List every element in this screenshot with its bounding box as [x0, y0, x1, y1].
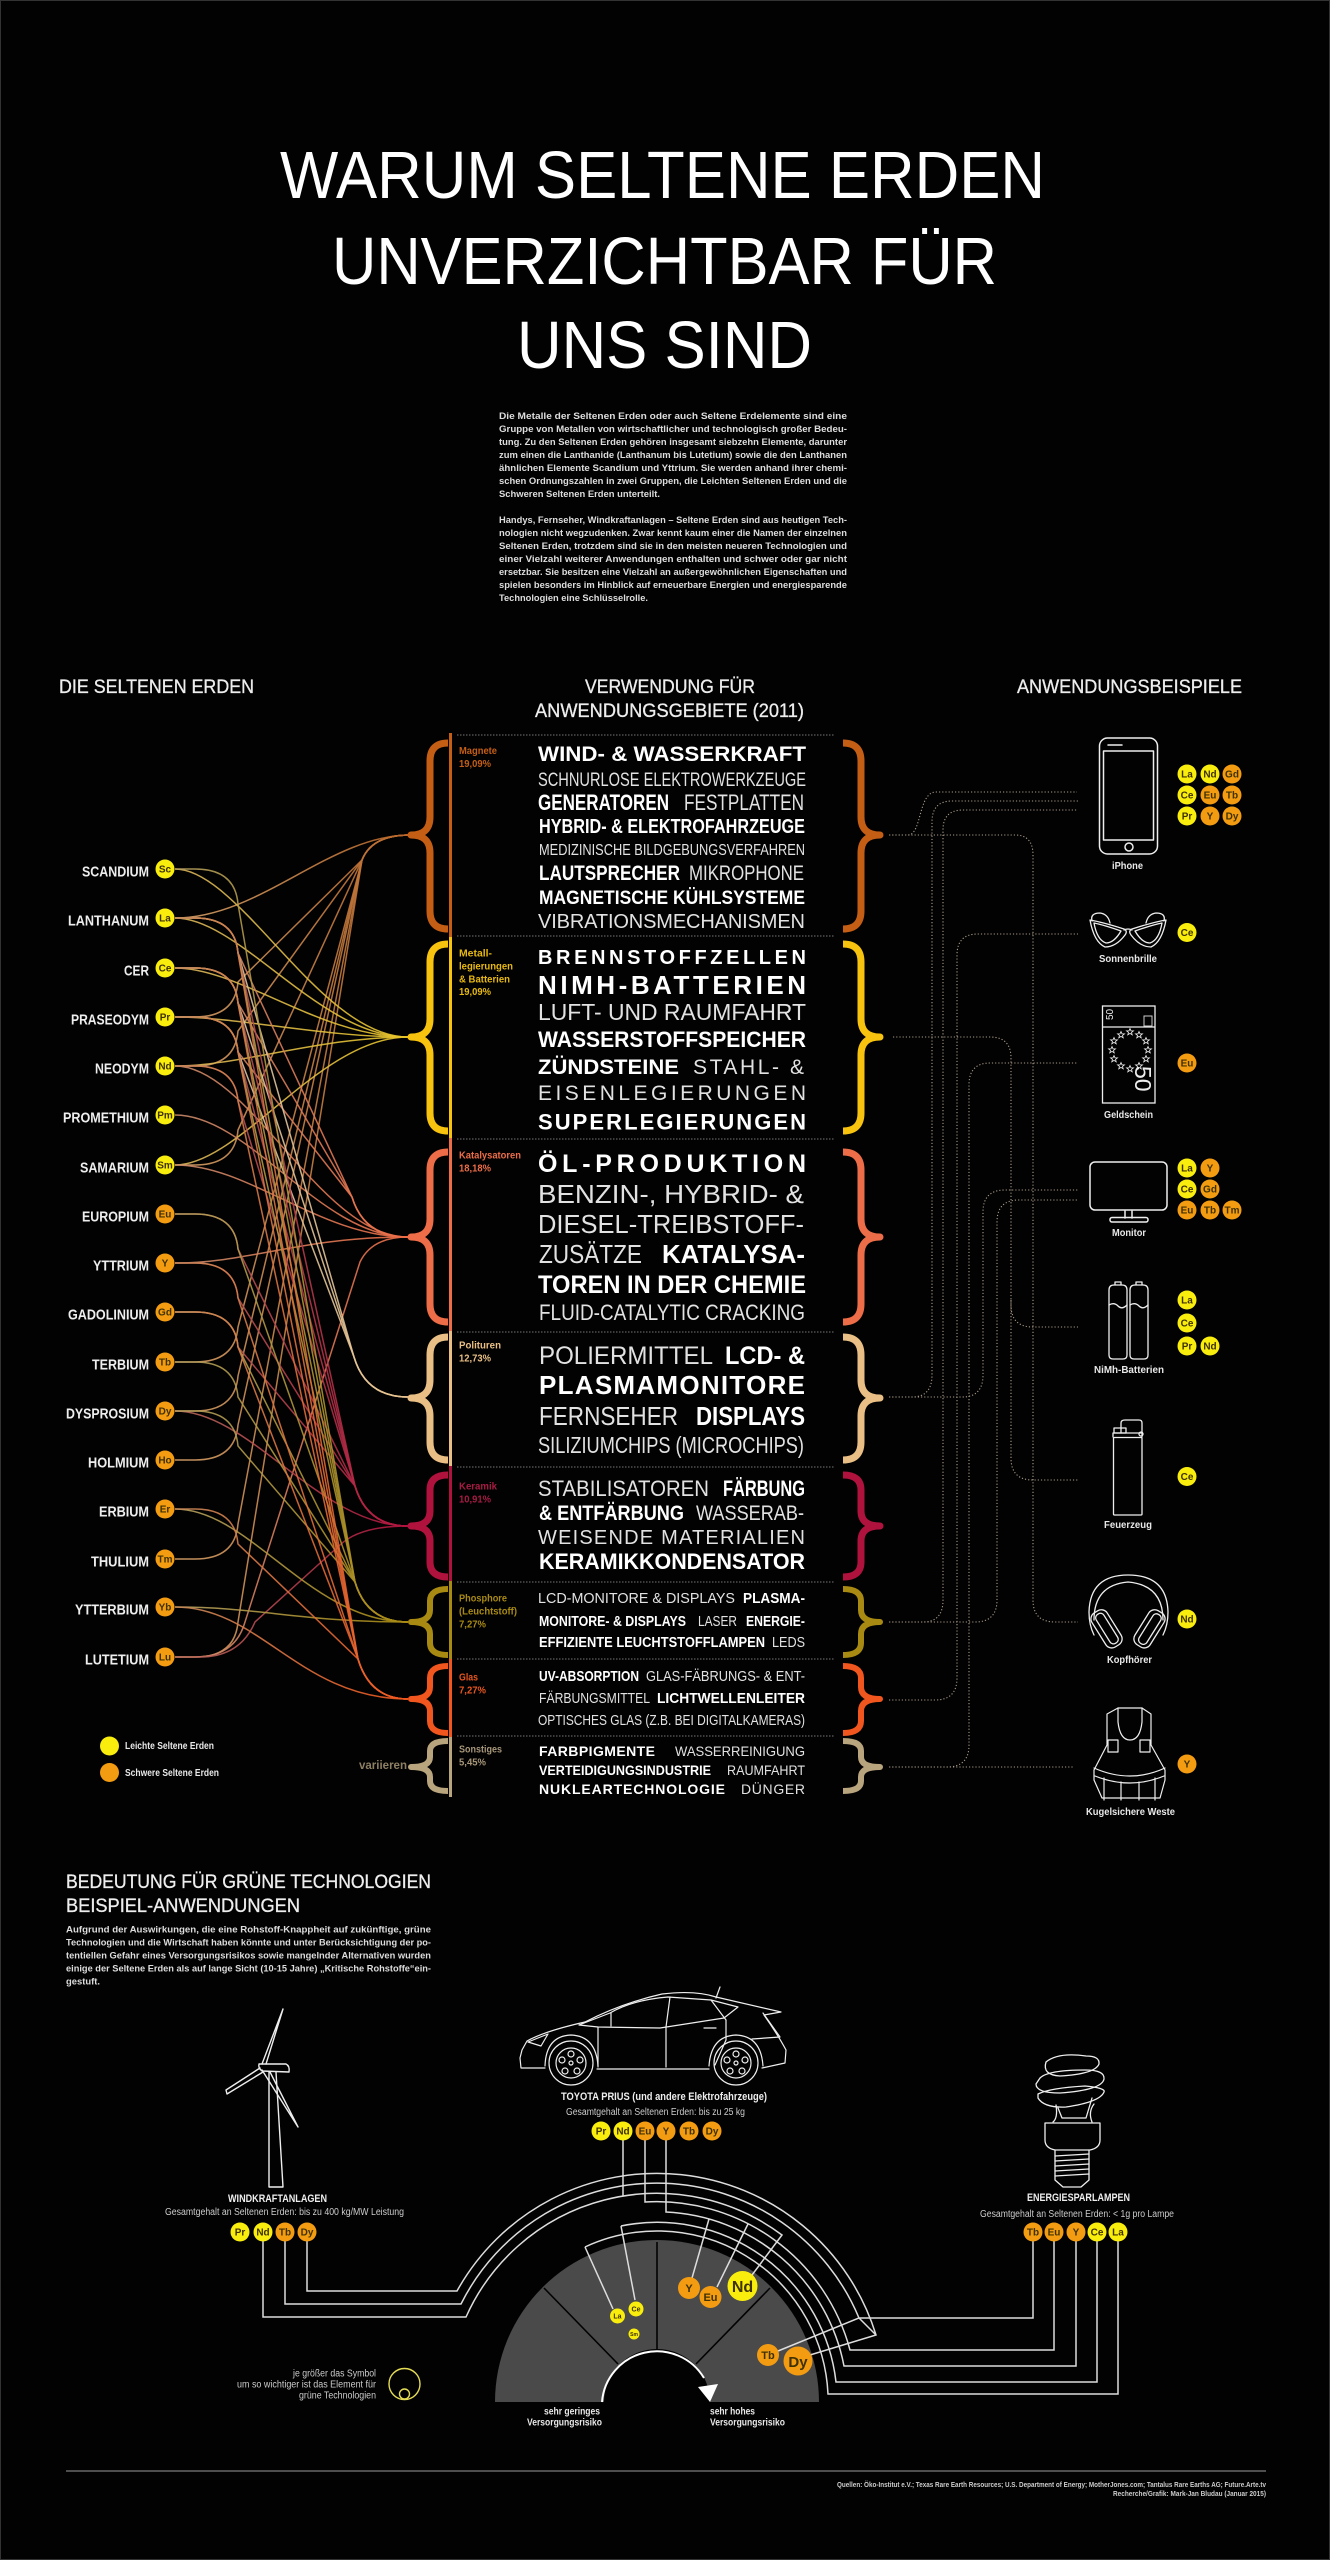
intro text: Die Metalle der Seltenen Erden oder auch Seltene Erdelemente sind eine: [499, 411, 847, 422]
uses: Phosphore: ENERGIE-: [746, 1614, 805, 1630]
element: ytterbium: YTTERBIUM: [75, 1602, 149, 1618]
label: sehr geringes Versorgungsrisiko: sehr geringes: [544, 2406, 600, 2418]
uses: Polituren: [538, 1342, 805, 1458]
element: terbium: [92, 1352, 174, 1374]
uses: Metalllegierungen: BRENNSTOFFZELLEN: [538, 947, 806, 969]
element: lutetium: Lu: [159, 1652, 171, 1664]
element: praseodym: Pr: [160, 1012, 170, 1024]
intro text: schen Ordnungszahlen in zwei Gruppen, die Leichten Seltenen Erden und die: [499, 476, 847, 487]
uses: Metalllegierungen: LUFT- UND RAUMFAHRT: [538, 999, 806, 1025]
text block: grüne Technologien: [66, 1924, 431, 1988]
element: lutetium: [85, 1648, 174, 1668]
legend: symbol size: je größer das Symbol: [292, 2368, 376, 2380]
category label: Polituren: [459, 1340, 501, 1364]
legend: symbol size: [237, 2368, 420, 2402]
element badges: Batterien: La: [1181, 1296, 1193, 1306]
label: Toyota Prius: TOYOTA PRIUS (und andere Elektrofahrzeuge): [561, 2091, 767, 2103]
category label: Keramik: [459, 1482, 497, 1506]
category label: Metalllegierungen: & Batterien: [459, 974, 510, 986]
example: Kopfhörer: [1088, 1575, 1196, 1666]
legend: element groups: [100, 1736, 219, 1782]
element badge: Ce: Ce: [1181, 928, 1194, 939]
uses: Katalysatoren: BENZIN-, HYBRID- &: [538, 1179, 804, 1209]
heading: grüne Technologien: [66, 1872, 431, 1917]
category label: Katalysatoren: [459, 1150, 521, 1174]
uses: Metalllegierungen: SUPERLEGIERUNGEN: [538, 1110, 806, 1134]
uses: Katalysatoren: TOREN IN DER CHEMIE: [538, 1271, 806, 1299]
element list: [63, 860, 174, 1668]
icon: banknote: [1102, 1006, 1156, 1103]
chart: supply risk semicircle: [495, 2240, 819, 2402]
element: gadolinium: Gd: [158, 1308, 172, 1318]
text block: grüne Technologien: tentiellen Gefahr eines Versorgungsrisikos sowie mangelnder Alternativen wurden: [66, 1950, 431, 1962]
element badges: risk chart: Y: [685, 2283, 693, 2295]
icon: car: [520, 1987, 786, 2085]
element badges: Monitor: La: [1181, 1164, 1193, 1174]
title: WARUM SELTENE ERDEN: [280, 138, 1045, 213]
element badges: Monitor: [1178, 1158, 1242, 1220]
uses: Glas: UV-ABSORPTION: [539, 1668, 639, 1685]
uses: Magnete: MAGNETISCHE KÜHLSYSTEME: [539, 888, 805, 909]
category label: Magnete: Magnete: [459, 746, 497, 757]
uses: Polituren: POLIERMITTEL: [539, 1342, 713, 1370]
element: gadolinium: GADOLINIUM: [68, 1306, 149, 1324]
element badges: Windkraftanlagen: Nd: [256, 2228, 270, 2238]
intro text: ähnlichen Elemente Scandium und Yttrium. Sie werden anhand ihrer chemi-: [499, 463, 847, 474]
dotted connector lines to examples: [889, 792, 1078, 1767]
uses: Keramik: & ENTFÄRBUNG: [539, 1502, 684, 1525]
category label: Phosphore: Phosphore: [459, 1594, 507, 1604]
title: UNVERZICHTBAR FÜR: [332, 224, 997, 299]
column heading: verwendung: ANWENDUNGSGEBIETE (2011): [535, 701, 804, 722]
element: neodym: NEODYM: [95, 1060, 149, 1078]
element: terbium: Tb: [159, 1358, 171, 1368]
uses: Magnete: VIBRATIONSMECHANISMEN: [538, 911, 805, 933]
element: lanthanum: La: [159, 914, 171, 924]
heading: grüne Technologien: BEISPIEL-ANWENDUNGEN: [66, 1896, 300, 1917]
element badge: Y: Y: [1184, 1760, 1191, 1770]
intro text: einer Vielzahl weiterer Anwendungen enthalten und schwer oder gar nicht: [499, 554, 848, 565]
element badges: Batterien: Pr: [1182, 1342, 1192, 1352]
uses: Metalllegierungen: EISENLEGIERUNGEN: [538, 1082, 806, 1105]
uses: Keramik: WASSERAB-: [696, 1502, 804, 1525]
element badges: Toyota Prius: Nd: [616, 2126, 630, 2138]
uses: Magnete: GENERATOREN: [538, 790, 669, 815]
intro text: [499, 411, 848, 604]
icon: sunglasses: [1090, 913, 1166, 947]
connector lines: elements to Magnete: [175, 835, 410, 1657]
element badges: Windkraftanlagen: Dy: [301, 2228, 314, 2238]
example: Feuerzeug: Feuerzeug: [1104, 1520, 1152, 1531]
example: Sonnenbrille: [1090, 913, 1196, 965]
category label: Magnete: 19,09%: [459, 759, 491, 770]
category label: Magnete: [459, 746, 497, 770]
element: dysprosium: DYSPROSIUM: [66, 1406, 149, 1422]
element: thulium: THULIUM: [91, 1554, 149, 1570]
icon: energy saving bulb: [1036, 2055, 1104, 2187]
title: [280, 138, 1045, 383]
uses: Keramik: STABILISATOREN: [538, 1476, 709, 1501]
element: neodym: Nd: [158, 1062, 172, 1072]
element badges: risk chart: Nd: [732, 2279, 753, 2296]
uses: Magnete: LAUTSPRECHER: [539, 862, 680, 885]
element badges: Toyota Prius: [592, 2122, 722, 2140]
example: Kopfhörer: Kopfhörer: [1107, 1655, 1152, 1666]
connector lines: elements to Katalysatoren: [175, 918, 408, 1657]
element badges: iPhone: La: [1181, 770, 1193, 780]
category label: Glas: 7,27%: [459, 1686, 486, 1696]
text block: grüne Technologien: Technologien und die Wirtschaft haben könnte und unter Berücksichtigung der po-: [66, 1938, 431, 1948]
element badges: Batterien: Nd: [1203, 1342, 1217, 1352]
label: Windkraftanlagen: [165, 2193, 404, 2218]
uses: Metalllegierungen: [538, 947, 806, 1134]
uses: Katalysatoren: ÖL-PRODUKTION: [538, 1149, 806, 1178]
uses: Polituren: LCD- &: [725, 1342, 805, 1370]
icon: banknote: 50: [1130, 1066, 1156, 1092]
element badges: Monitor: Tb: [1204, 1206, 1216, 1216]
uses: Phosphore: LEDS: [772, 1635, 805, 1651]
element badges: Energiesparlampen: Ce: [1091, 2228, 1104, 2238]
element badges: Batterien: [1178, 1290, 1220, 1356]
icon: lighter: [1113, 1420, 1143, 1515]
panel: Magnete: [411, 733, 880, 937]
label: Energiesparlampen: Gesamtgehalt an Seltenen Erden: < 1g pro Lampe: [980, 2209, 1174, 2220]
element: holmium: HOLMIUM: [88, 1454, 149, 1472]
legend: symbol size: um so wichtiger ist das Element für: [237, 2380, 377, 2390]
element badges: iPhone: Tb: [1226, 790, 1238, 802]
uses: Katalysatoren: ZUSÄTZE: [539, 1239, 642, 1269]
category label: Polituren: 12,73%: [459, 1354, 491, 1364]
element: yttrium: YTTRIUM: [93, 1258, 149, 1274]
uses: Glas: OPTISCHES GLAS (Z.B. BEI DIGITALKAMERAS): [538, 1712, 805, 1729]
panel: Phosphore: [411, 1581, 880, 1659]
element badge: Ce: Ce: [1181, 1472, 1194, 1483]
category label: Metalllegierungen: legierungen: [459, 962, 513, 972]
element: ytterbium: Yb: [159, 1602, 171, 1614]
uses: Keramik: WEISENDE MATERIALIEN: [538, 1527, 805, 1549]
icon: monitor: [1090, 1162, 1167, 1222]
element badges: Windkraftanlagen: Pr: [235, 2228, 245, 2238]
element badges: iPhone: Ce: [1181, 790, 1194, 802]
legend: element groups: Schwere Seltene Erden: [125, 1768, 219, 1779]
label: Energiesparlampen: ENERGIESPARLAMPEN: [1027, 2192, 1130, 2204]
element badges: Energiesparlampen: Tb: [1027, 2228, 1039, 2238]
uses: Phosphore: EFFIZIENTE LEUCHTSTOFFLAMPEN: [539, 1635, 765, 1651]
example: Geldschein: [1102, 1006, 1196, 1121]
element badges: risk chart: Sm: [630, 2332, 638, 2338]
category label: Keramik: 10,91%: [459, 1494, 491, 1506]
category label: Glas: Glas: [459, 1672, 478, 1684]
icon: phone: [1100, 738, 1158, 854]
element: scandium: Sc: [159, 864, 172, 876]
label: variieren: variieren: [359, 1758, 407, 1772]
element: dysprosium: Dy: [159, 1406, 172, 1418]
example: Sonnenbrille: Sonnenbrille: [1099, 954, 1157, 965]
uses: Sonstiges: DÜNGER: [741, 1780, 805, 1797]
legend: symbol size: grüne Technologien: [299, 2390, 376, 2402]
element: neodym: [95, 1056, 174, 1078]
icon: vest: [1094, 1708, 1165, 1800]
element badges: risk chart: La: [613, 2314, 622, 2320]
uses: Magnete: HYBRID- & ELEKTROFAHRZEUGE: [539, 816, 805, 838]
uses: Polituren: SILIZIUMCHIPS (MICROCHIPS): [538, 1432, 804, 1458]
element: europium: Eu: [159, 1210, 171, 1220]
category label: Phosphore: [459, 1594, 517, 1630]
category label: Keramik: Keramik: [459, 1482, 497, 1492]
example: Monitor: [1090, 1158, 1242, 1239]
element badges: Monitor: Eu: [1181, 1206, 1193, 1216]
element: thulium: Tm: [158, 1554, 173, 1566]
intro text: ersetzbar. Sie besitzen eine Vielzahl an außergewöhnlichen Eigenschaften und: [499, 567, 847, 578]
intro text: Schweren Seltenen Erden unterteilt.: [499, 489, 660, 500]
label: Windkraftanlagen: Gesamtgehalt an Seltenen Erden: bis zu 400 kg/MW Leistung: [165, 2207, 404, 2218]
panel: Polituren: [411, 1331, 880, 1466]
uses: Keramik: [538, 1476, 805, 1574]
category label: Polituren: Polituren: [459, 1340, 501, 1352]
element badges: Energiesparlampen: Y: [1073, 2228, 1080, 2238]
icon: headphones: [1088, 1575, 1168, 1651]
element badges: Toyota Prius: Dy: [706, 2126, 719, 2138]
element: erbium: [99, 1500, 174, 1520]
intro text: zum einen die Lanthanide (Lanthanum bis Lutetium) sowie die den Lanthanen: [499, 450, 847, 461]
element: terbium: TERBIUM: [92, 1356, 149, 1374]
uses: Magnete: MEDIZINISCHE BILDGEBUNGSVERFAHREN: [539, 842, 805, 859]
sources: Recherche/Grafik: Mark-Jan Bludau (Januar 2015): [1113, 2489, 1266, 2498]
separator dotted lines: [457, 735, 835, 1736]
example: Kugelsichere Weste: [1086, 1708, 1196, 1818]
element badges: Monitor: Y: [1207, 1164, 1214, 1174]
uses: Metalllegierungen: NIMH-BATTERIEN: [538, 970, 806, 1000]
connector lines: elements to Glas: [175, 918, 408, 1699]
example: NiMh-Batterien: NiMh-Batterien: [1094, 1365, 1164, 1376]
uses: Phosphore: LASER: [698, 1614, 737, 1630]
element badges: risk chart: Eu: [703, 2292, 718, 2304]
element: cer: CER: [124, 962, 149, 980]
category label: Metalllegierungen: [459, 948, 513, 998]
uses: Sonstiges: [539, 1743, 805, 1797]
uses: Metalllegierungen: WASSERSTOFFSPEICHER: [538, 1027, 806, 1052]
connector lines: elements to Metalllegierungen: [175, 869, 408, 1165]
category label: Sonstiges: [459, 1744, 502, 1768]
example: Feuerzeug: [1104, 1420, 1196, 1531]
uses: Sonstiges: RAUMFAHRT: [727, 1762, 805, 1778]
uses: Sonstiges: VERTEIDIGUNGSINDUSTRIE: [539, 1762, 711, 1778]
uses: Phosphore: [538, 1591, 805, 1651]
element: cer: [124, 958, 174, 980]
element badges: Windkraftanlagen: Tb: [279, 2228, 291, 2238]
element badges: iPhone: Dy: [1226, 812, 1239, 822]
uses: Polituren: PLASMAMONITORE: [539, 1370, 805, 1400]
intro text: spielen besonders im Hinblick auf erneuerbare Energien und energiesparende: [499, 580, 847, 591]
element badges: Toyota Prius: Tb: [683, 2126, 695, 2138]
element badges: Monitor: Tm: [1224, 1206, 1240, 1216]
element badges: iPhone: [1178, 764, 1242, 826]
heading: grüne Technologien: BEDEUTUNG FÜR GRÜNE TECHNOLOGIEN: [66, 1872, 431, 1893]
example: NiMh-Batterien: [1094, 1282, 1220, 1376]
uses: Katalysatoren: FLUID-CATALYTIC CRACKING: [539, 1300, 805, 1325]
text block: grüne Technologien: Aufgrund der Auswirkungen, die eine Rohstoff-Knappheit auf zukünftige, grüne: [66, 1924, 431, 1936]
intro text: Gruppe von Metallen von wirtschaftlicher und technologisch großer Bedeu-: [499, 424, 847, 435]
panel: Glas: [411, 1659, 880, 1737]
uses: Sonstiges: NUKLEARTECHNOLOGIE: [539, 1781, 725, 1797]
uses: Keramik: KERAMIKKONDENSATOR: [539, 1549, 805, 1574]
element: praseodym: PRASEODYM: [71, 1012, 149, 1028]
category label: Phosphore: (Leuchtstoff): [459, 1606, 517, 1618]
uses: Sonstiges: FARBPIGMENTE: [539, 1743, 655, 1759]
uses: Magnete: [538, 743, 806, 933]
element badges: Toyota Prius: Eu: [639, 2126, 651, 2138]
element: holmium: Ho: [158, 1456, 172, 1466]
example: Monitor: Monitor: [1112, 1228, 1146, 1239]
element: lutetium: LUTETIUM: [85, 1652, 149, 1668]
uses: Sonstiges: WASSERREINIGUNG: [675, 1743, 805, 1759]
element badges: Energiesparlampen: Eu: [1048, 2228, 1060, 2238]
icon: batteries: [1109, 1282, 1148, 1359]
example: iPhone: iPhone: [1112, 861, 1143, 872]
intro text: Seltenen Erden, trotzdem sind sie in den meisten neueren Technologien und: [499, 541, 847, 552]
element badges: Batterien: Ce: [1181, 1318, 1194, 1330]
connector lines: elements to Phosphore: [175, 869, 408, 1622]
example: iPhone: [1100, 738, 1242, 872]
element badges: Windkraftanlagen: [230, 2222, 316, 2242]
uses: Phosphore: MONITORE- & DISPLAYS: [539, 1614, 686, 1630]
category label: Sonstiges: Sonstiges: [459, 1744, 502, 1756]
label: sehr hohes Versorgungsrisiko: Versorgungsrisiko: [710, 2418, 785, 2428]
example: Kugelsichere Weste: Kugelsichere Weste: [1086, 1807, 1175, 1818]
element badges: iPhone: Pr: [1182, 812, 1192, 822]
label: sehr geringes Versorgungsrisiko: Versorgungsrisiko: [527, 2418, 602, 2428]
uses: Glas: [538, 1668, 805, 1729]
icon: banknote: 50: [1105, 1008, 1116, 1020]
uses: Polituren: DISPLAYS: [696, 1401, 805, 1431]
uses: Magnete: MIKROPHONE: [689, 862, 804, 885]
connector lines: elements to Polituren: [175, 918, 408, 1397]
element: erbium: ERBIUM: [99, 1504, 149, 1520]
panel: Keramik: [411, 1466, 880, 1581]
column heading: die seltenen erden: DIE SELTENEN ERDEN: [59, 677, 254, 698]
element badges: Monitor: Ce: [1181, 1184, 1194, 1196]
label: Toyota Prius: [561, 2091, 767, 2118]
label: sehr geringes Versorgungsrisiko: [527, 2406, 602, 2428]
element: lanthanum: LANTHANUM: [68, 912, 149, 930]
element: samarium: SAMARIUM: [80, 1160, 149, 1176]
intro text: nologien nicht wegzudenken. Zwar kennt kaum einer die Namen der einzelnen: [499, 528, 847, 539]
label: sehr hohes Versorgungsrisiko: [710, 2406, 785, 2428]
element badges: risk chart: [610, 2271, 812, 2376]
element: cer: Ce: [159, 964, 172, 974]
uses: Magnete: SCHNURLOSE ELEKTROWERKZEUGE: [538, 770, 806, 791]
label: Energiesparlampen: [980, 2192, 1174, 2220]
label: Windkraftanlagen: WINDKRAFTANLAGEN: [228, 2193, 327, 2205]
element badges: Energiesparlampen: [1024, 2222, 1128, 2242]
category label: Katalysatoren: Katalysatoren: [459, 1150, 521, 1162]
example: Geldschein: Geldschein: [1104, 1110, 1153, 1121]
title: UNS SIND: [517, 308, 812, 383]
legend: element groups: Leichte Seltene Erden: [125, 1741, 214, 1752]
uses: Magnete: WIND- & WASSERKRAFT: [538, 743, 806, 766]
element: samarium: Sm: [157, 1160, 173, 1172]
element: yttrium: Y: [162, 1258, 169, 1270]
category label: Sonstiges: 5,45%: [459, 1758, 486, 1768]
element badges: Toyota Prius: Y: [663, 2126, 670, 2138]
connector arcs and leader lines: [263, 2131, 1118, 2394]
uses: Phosphore: LCD-MONITORE & DISPLAYS: [538, 1591, 735, 1607]
element badges: Toyota Prius: Pr: [596, 2126, 606, 2138]
element: scandium: SCANDIUM: [82, 864, 149, 880]
panel: Metalllegierungen und Batterien: [411, 937, 880, 1138]
category label: Katalysatoren: 18,18%: [459, 1164, 491, 1174]
element: europium: EUROPIUM: [82, 1208, 149, 1226]
element badges: Energiesparlampen: La: [1112, 2228, 1124, 2238]
element: erbium: Er: [160, 1504, 170, 1516]
element badges: iPhone: Gd: [1225, 770, 1239, 780]
uses: Glas: LICHTWELLENLEITER: [657, 1690, 805, 1707]
column heading: verwendung: VERWENDUNG FÜR: [585, 677, 755, 698]
element: holmium: [88, 1450, 174, 1472]
element: yttrium: [93, 1254, 174, 1274]
element: promethium: PROMETHIUM: [63, 1110, 149, 1126]
element: promethium: Pm: [157, 1110, 173, 1122]
uses: Katalysatoren: [538, 1149, 806, 1325]
uses: Phosphore: PLASMA-: [743, 1591, 805, 1607]
text block: grüne Technologien: gestuft.: [66, 1976, 100, 1988]
label: sehr hohes Versorgungsrisiko: sehr hohes: [710, 2406, 755, 2418]
column heading: verwendung: [535, 677, 804, 722]
element badges: iPhone: Y: [1207, 812, 1214, 822]
category label: Glas: [459, 1672, 486, 1696]
uses: Magnete: FESTPLATTEN: [684, 790, 804, 815]
panel: Katalysatoren: [411, 1138, 880, 1331]
column heading: anwendungsbeispiele: ANWENDUNGSBEISPIELE: [1017, 677, 1242, 698]
label: Toyota Prius: Gesamtgehalt an Seltenen Erden: bis zu 25 kg: [566, 2107, 745, 2118]
element badges: risk chart: Ce: [632, 2306, 641, 2314]
text block: grüne Technologien: einige der Seltene Erden als auf lange Sicht (10-15 Jahre) „Kritische Rohstoffe“ein-: [66, 1964, 431, 1974]
element badge: Nd: Nd: [1180, 1614, 1194, 1626]
intro text: Technologien eine Schlüsselrolle.: [499, 593, 648, 604]
icon: wind turbine: [226, 2009, 298, 2187]
element badges: risk chart: Dy: [788, 2354, 808, 2371]
element: thulium: [91, 1550, 174, 1570]
element badges: iPhone: Nd: [1203, 770, 1217, 780]
intro text: Handys, Fernseher, Windkraftanlagen – Seltene Erden sind aus heutigen Tech-: [499, 515, 847, 526]
intro text: tung. Zu den Seltenen Erden gehören insgesamt siebzehn Elemente, darunter: [499, 437, 847, 448]
arrow: risk direction: [602, 2351, 718, 2402]
uses: Metalllegierungen: ZÜNDSTEINE: [538, 1056, 679, 1079]
uses: Polituren: FERNSEHER: [539, 1401, 678, 1431]
uses: Keramik: FÄRBUNG: [723, 1476, 805, 1501]
category label: Phosphore: 7,27%: [459, 1620, 486, 1630]
uses: Katalysatoren: KATALYSA-: [662, 1239, 805, 1269]
element badges: risk chart: Tb: [761, 2350, 775, 2362]
uses: Glas: FÄRBUNGSMITTEL: [539, 1690, 650, 1707]
uses: Katalysatoren: DIESEL-TREIBSTOFF-: [538, 1209, 804, 1239]
element badges: iPhone: Eu: [1204, 790, 1216, 802]
uses: Glas: GLAS-FÄBRUNGS- & ENT-: [646, 1668, 805, 1685]
connector lines: elements to Keramik: [175, 918, 408, 1657]
sources: [837, 2480, 1267, 2498]
element badge: Eu: Eu: [1181, 1058, 1193, 1070]
panel: Sonstiges: [411, 1737, 880, 1797]
uses: Metalllegierungen: STAHL- &: [693, 1056, 804, 1079]
category label: Metalllegierungen: 19,09%: [459, 987, 491, 998]
element badges: Monitor: Gd: [1203, 1184, 1217, 1196]
category label: Metalllegierungen: Metall-: [459, 948, 492, 960]
